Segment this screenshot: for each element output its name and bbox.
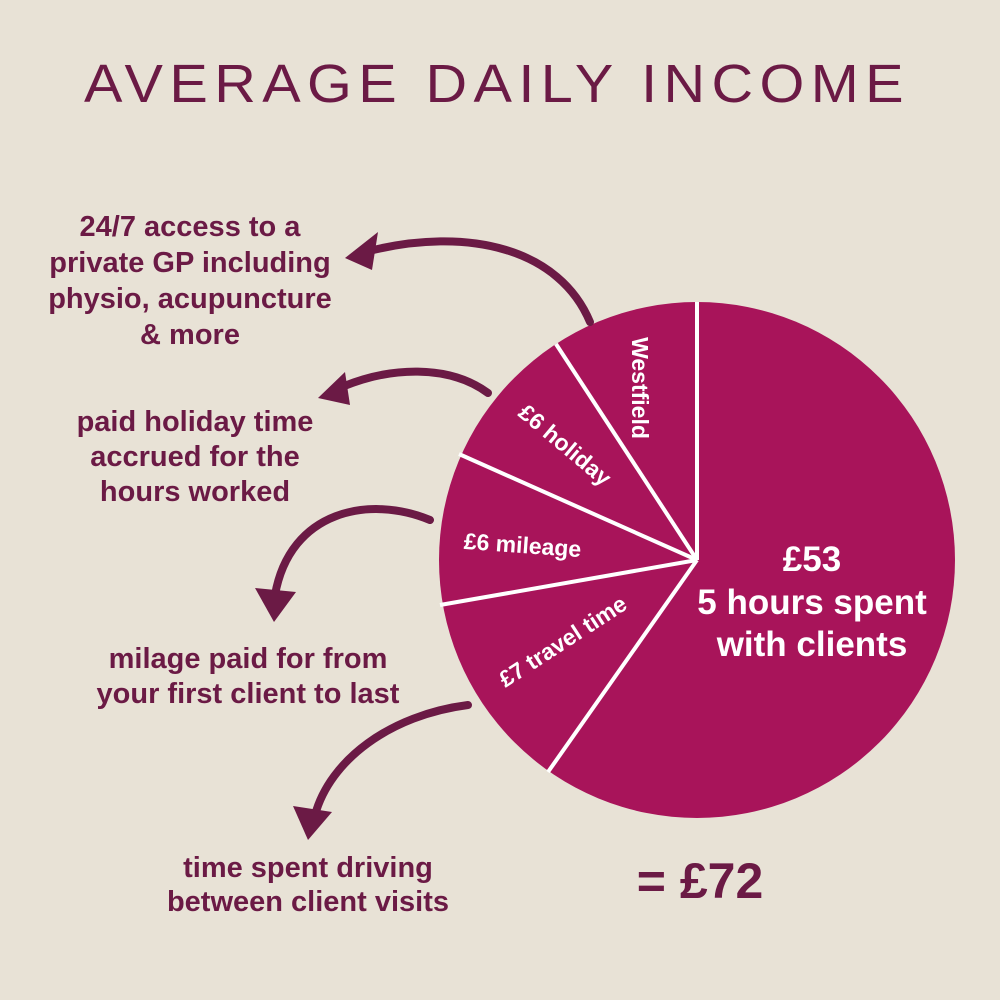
text: mileage: your first client to last xyxy=(97,678,400,710)
text: travel: time spent driving xyxy=(183,852,433,884)
main slice text: £53 xyxy=(783,540,841,579)
total: = £72 xyxy=(637,853,763,909)
main slice text: with clients xyxy=(716,625,907,664)
text: GP access: private GP including xyxy=(49,247,331,279)
text: travel: between client visits xyxy=(167,886,449,918)
text: holiday: paid holiday time xyxy=(77,406,313,438)
text: holiday: hours worked xyxy=(100,476,290,508)
slice label: Westfield: Westfield xyxy=(627,337,653,439)
text: holiday: accrued for the xyxy=(90,441,300,473)
text: mileage: milage paid for from xyxy=(109,643,387,675)
slice label: holiday: £6 holiday xyxy=(514,399,617,491)
main slice text: 5 hours spent xyxy=(697,583,927,622)
slice label: travel time: £7 travel time xyxy=(494,590,631,692)
text: GP access: & more xyxy=(140,319,240,351)
title: AVERAGE DAILY INCOME xyxy=(84,54,910,114)
slice label: mileage: £6 mileage xyxy=(463,528,582,562)
pie chart xyxy=(439,302,955,818)
text: GP access: physio, acupuncture xyxy=(48,283,332,315)
arrows xyxy=(275,241,590,815)
text: GP access: 24/7 access to a xyxy=(80,211,301,243)
